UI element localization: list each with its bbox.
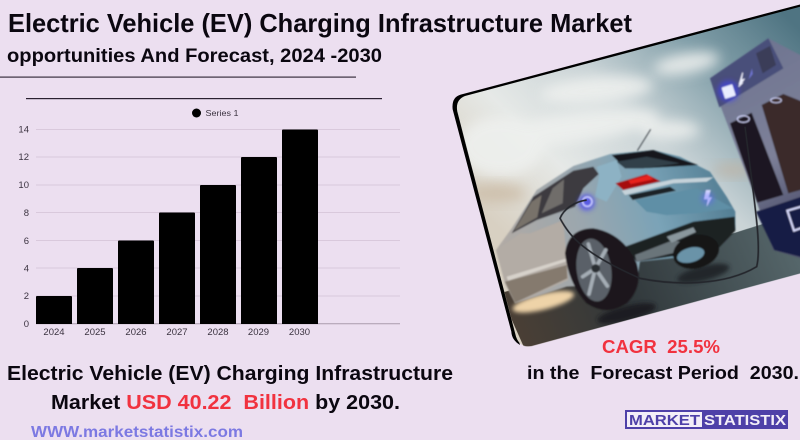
callout: CAGR bbox=[527, 336, 799, 383]
title: Electric Vehicle (EV) Charging Infrastructure Market bbox=[8, 8, 632, 38]
rear bumper bbox=[625, 217, 735, 262]
subtitle: opportunities And Forecast, 2024 -2030 bbox=[7, 45, 382, 67]
market size text: Electric Vehicle (EV) Charging Infrastructure bbox=[7, 362, 453, 385]
front wheel bbox=[565, 228, 639, 310]
callout: CAGR: CAGR 25.5% bbox=[602, 336, 720, 357]
x axis labels: 2026 bbox=[125, 327, 147, 338]
lower door panel bbox=[523, 220, 568, 286]
logo: Market Statistix: MARKET bbox=[629, 412, 700, 429]
chart legend: Series 1 bbox=[206, 108, 239, 118]
charging station bbox=[710, 38, 800, 260]
y axis labels: 2 bbox=[24, 291, 29, 302]
x axis labels: 2027 bbox=[166, 327, 188, 338]
car windows bbox=[512, 167, 599, 233]
rear lower panel bbox=[635, 188, 733, 215]
market size text: Market USD 40.22 Billion by 2030. bbox=[51, 391, 400, 414]
y axis labels: 6 bbox=[24, 236, 29, 247]
title bbox=[7, 8, 632, 67]
side highlight bbox=[595, 160, 622, 202]
chart legend bbox=[192, 108, 239, 118]
x axis labels: 2025 bbox=[84, 327, 106, 338]
y axis labels: 10 bbox=[18, 180, 29, 191]
x axis labels: 2030 bbox=[289, 327, 310, 338]
forecast period text: in the Forecast Period 2030. bbox=[527, 362, 799, 383]
logo: Market Statistix: STATISTIX bbox=[704, 412, 786, 429]
road bbox=[504, 224, 800, 346]
y axis labels: 4 bbox=[24, 264, 29, 274]
y axis labels: 12 bbox=[18, 152, 29, 163]
y axis labels bbox=[18, 124, 29, 330]
logo: Market Statistix bbox=[625, 410, 788, 429]
rear window and spoiler bbox=[612, 150, 698, 168]
photo frame bbox=[452, 3, 800, 345]
y axis labels: 8 bbox=[24, 208, 29, 219]
car bbox=[496, 129, 735, 310]
bar chart bbox=[18, 108, 400, 338]
x axis labels bbox=[43, 327, 310, 338]
bars bbox=[36, 130, 318, 324]
y axis labels: 14 bbox=[18, 124, 29, 136]
y axis labels: 0 bbox=[24, 319, 29, 330]
clouds bbox=[457, 48, 721, 177]
photo: electric car charging at station bbox=[440, 0, 800, 353]
market size text bbox=[7, 362, 453, 414]
x axis labels: 2029 bbox=[248, 327, 269, 338]
x axis labels: 2028 bbox=[207, 327, 229, 338]
car body bbox=[496, 150, 735, 303]
tail light bbox=[615, 174, 661, 190]
rear wheel bbox=[672, 235, 720, 270]
station icons bbox=[718, 80, 739, 102]
x axis labels: 2024 bbox=[43, 327, 65, 338]
charging cable bbox=[560, 127, 758, 283]
charge port glow bbox=[579, 194, 595, 210]
